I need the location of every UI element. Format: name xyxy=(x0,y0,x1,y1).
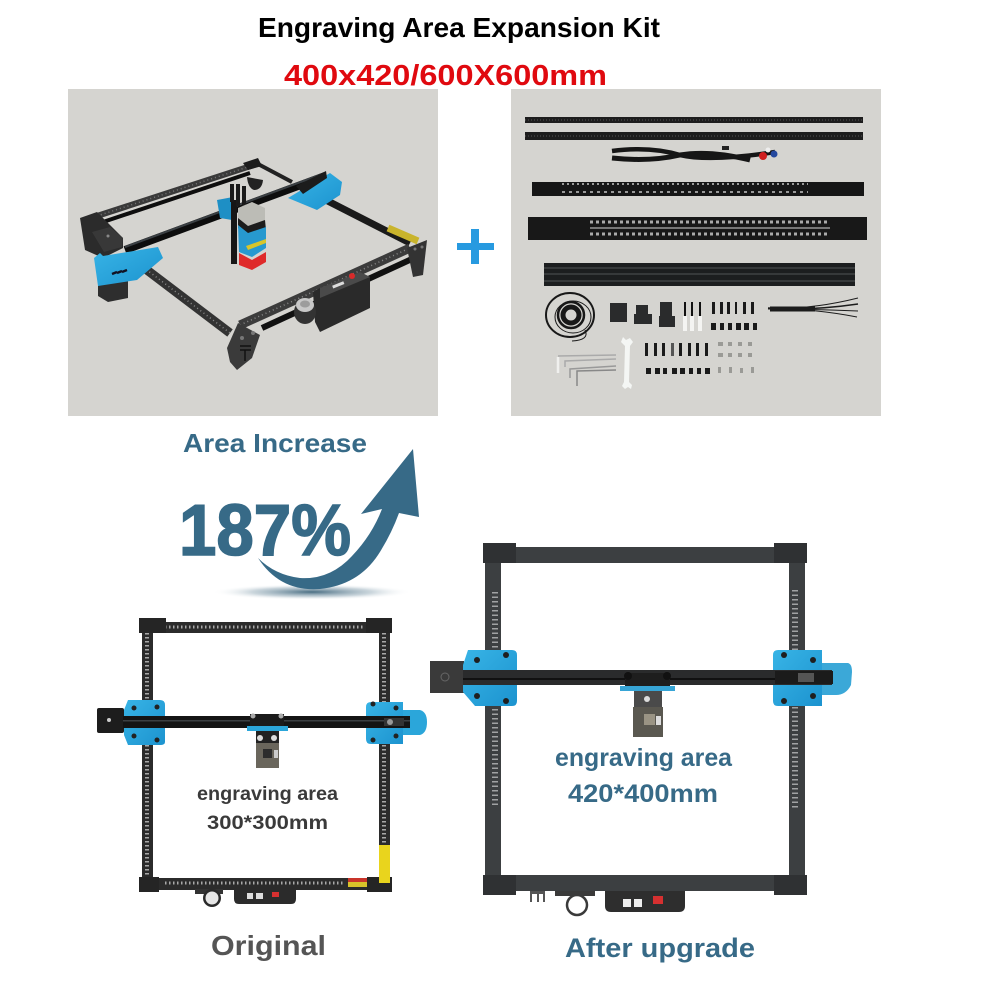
right plate xyxy=(773,650,852,706)
right bracket xyxy=(288,171,342,210)
wire harness xyxy=(612,146,778,160)
left motor and bracket xyxy=(80,212,163,302)
caption: after upgrade: After upgrade xyxy=(565,933,755,963)
label: engraving area xyxy=(555,744,733,808)
panel: laser engraver photo xyxy=(68,89,438,416)
standoffs xyxy=(683,302,702,331)
subtitle: sizes: 400x420/600X600mm xyxy=(284,60,607,92)
label: engraving area xyxy=(197,784,338,834)
rail three xyxy=(544,263,855,286)
rail one xyxy=(532,182,864,196)
gantry beam xyxy=(125,173,325,250)
title: Engraving Area Expansion Kit xyxy=(258,12,660,43)
icon: plus xyxy=(457,229,494,264)
laser head xyxy=(620,672,675,737)
laser head xyxy=(247,714,288,768)
control box xyxy=(313,272,370,332)
right plate xyxy=(366,702,427,744)
screws xyxy=(645,302,757,374)
arrow shadow xyxy=(212,584,412,600)
front foot xyxy=(227,323,260,370)
label: engraving area: engraving area xyxy=(197,784,338,805)
rail two xyxy=(528,217,867,240)
gantry xyxy=(123,716,410,728)
tiny nuts and washers xyxy=(718,342,754,373)
gantry xyxy=(463,670,833,685)
panel: upgrade kit parts xyxy=(511,89,881,416)
frame xyxy=(139,618,392,892)
heading: area increase: Area Increase xyxy=(183,428,367,458)
knob and control box xyxy=(195,889,296,907)
wrench xyxy=(621,337,633,389)
left motor and plate xyxy=(430,650,517,706)
hex keys xyxy=(558,355,616,386)
laser head xyxy=(217,184,266,270)
right foot xyxy=(407,240,427,277)
focus knob xyxy=(294,298,316,324)
left rail xyxy=(143,267,230,333)
rear corner and motor cone xyxy=(243,158,263,190)
diagram: original machine xyxy=(97,618,427,907)
left motor and plate xyxy=(97,700,165,745)
belt coil xyxy=(546,293,594,341)
zip ties xyxy=(768,298,858,317)
knob, bracket and control box xyxy=(530,891,685,915)
label: engraving area: engraving area xyxy=(555,744,733,772)
frame xyxy=(483,543,807,895)
label: engraving area: 420*400mm xyxy=(568,780,718,808)
brackets xyxy=(610,302,675,327)
right rail xyxy=(258,164,418,243)
label: engraving area: 300*300mm xyxy=(207,813,328,834)
back rail xyxy=(97,164,257,222)
belts xyxy=(525,117,863,140)
arrow: increase xyxy=(258,449,419,589)
diagram: upgraded machine xyxy=(430,543,852,915)
front rail xyxy=(240,248,414,328)
big number: 187%: 187% xyxy=(179,491,351,571)
caption: original: Original xyxy=(211,930,326,961)
